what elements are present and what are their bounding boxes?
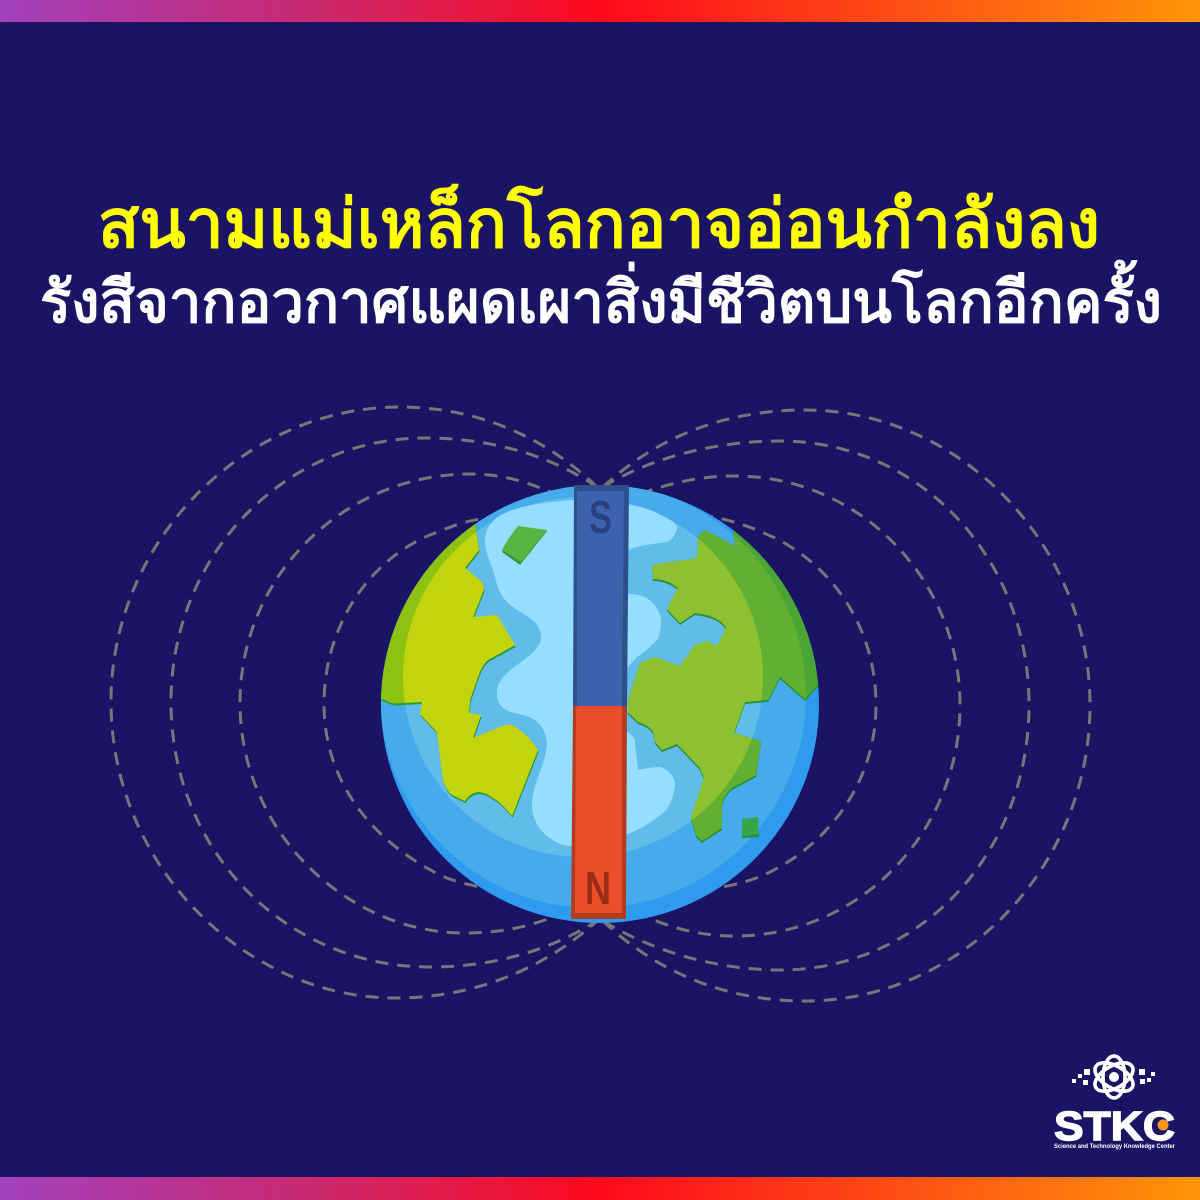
logo: pixel dots (1072, 1069, 1155, 1085)
island top left (502, 526, 547, 565)
bottom gradient bar (0, 1177, 1200, 1200)
title (40, 183, 1162, 335)
magnetic field lines (111, 407, 1090, 1001)
field lines: left side (111, 407, 597, 998)
north pole: N (585, 862, 611, 914)
logo: atom icon (1090, 1056, 1138, 1098)
south pole: S (589, 491, 612, 543)
logo: orange dot (1158, 1120, 1168, 1130)
island bottom right (742, 817, 759, 838)
logo: wordmark: STKC (1054, 1103, 1175, 1149)
earth globe (370, 482, 830, 923)
shallow water right (620, 503, 677, 836)
top gradient bar (0, 0, 1200, 22)
right continent (628, 530, 830, 843)
STKC logo (1054, 1056, 1176, 1150)
title line 2: รังสีจากอวกาศแผดเผาสิ่งมีชีวิตบนโลกอีกครั้ง (40, 260, 1162, 335)
bar magnet (571, 485, 629, 919)
globe ocean layers (380, 482, 819, 923)
shallow water left (485, 497, 600, 846)
north pole (571, 706, 627, 919)
left continent (370, 520, 539, 818)
logo: tagline: Science and Technology Knowledge Center (1054, 1144, 1176, 1150)
south pole (573, 485, 629, 706)
title line 1: สนามแม่เหล็กโลกอาจอ่อนกำลังลง (98, 183, 1100, 262)
field lines: right side (603, 410, 1090, 1001)
